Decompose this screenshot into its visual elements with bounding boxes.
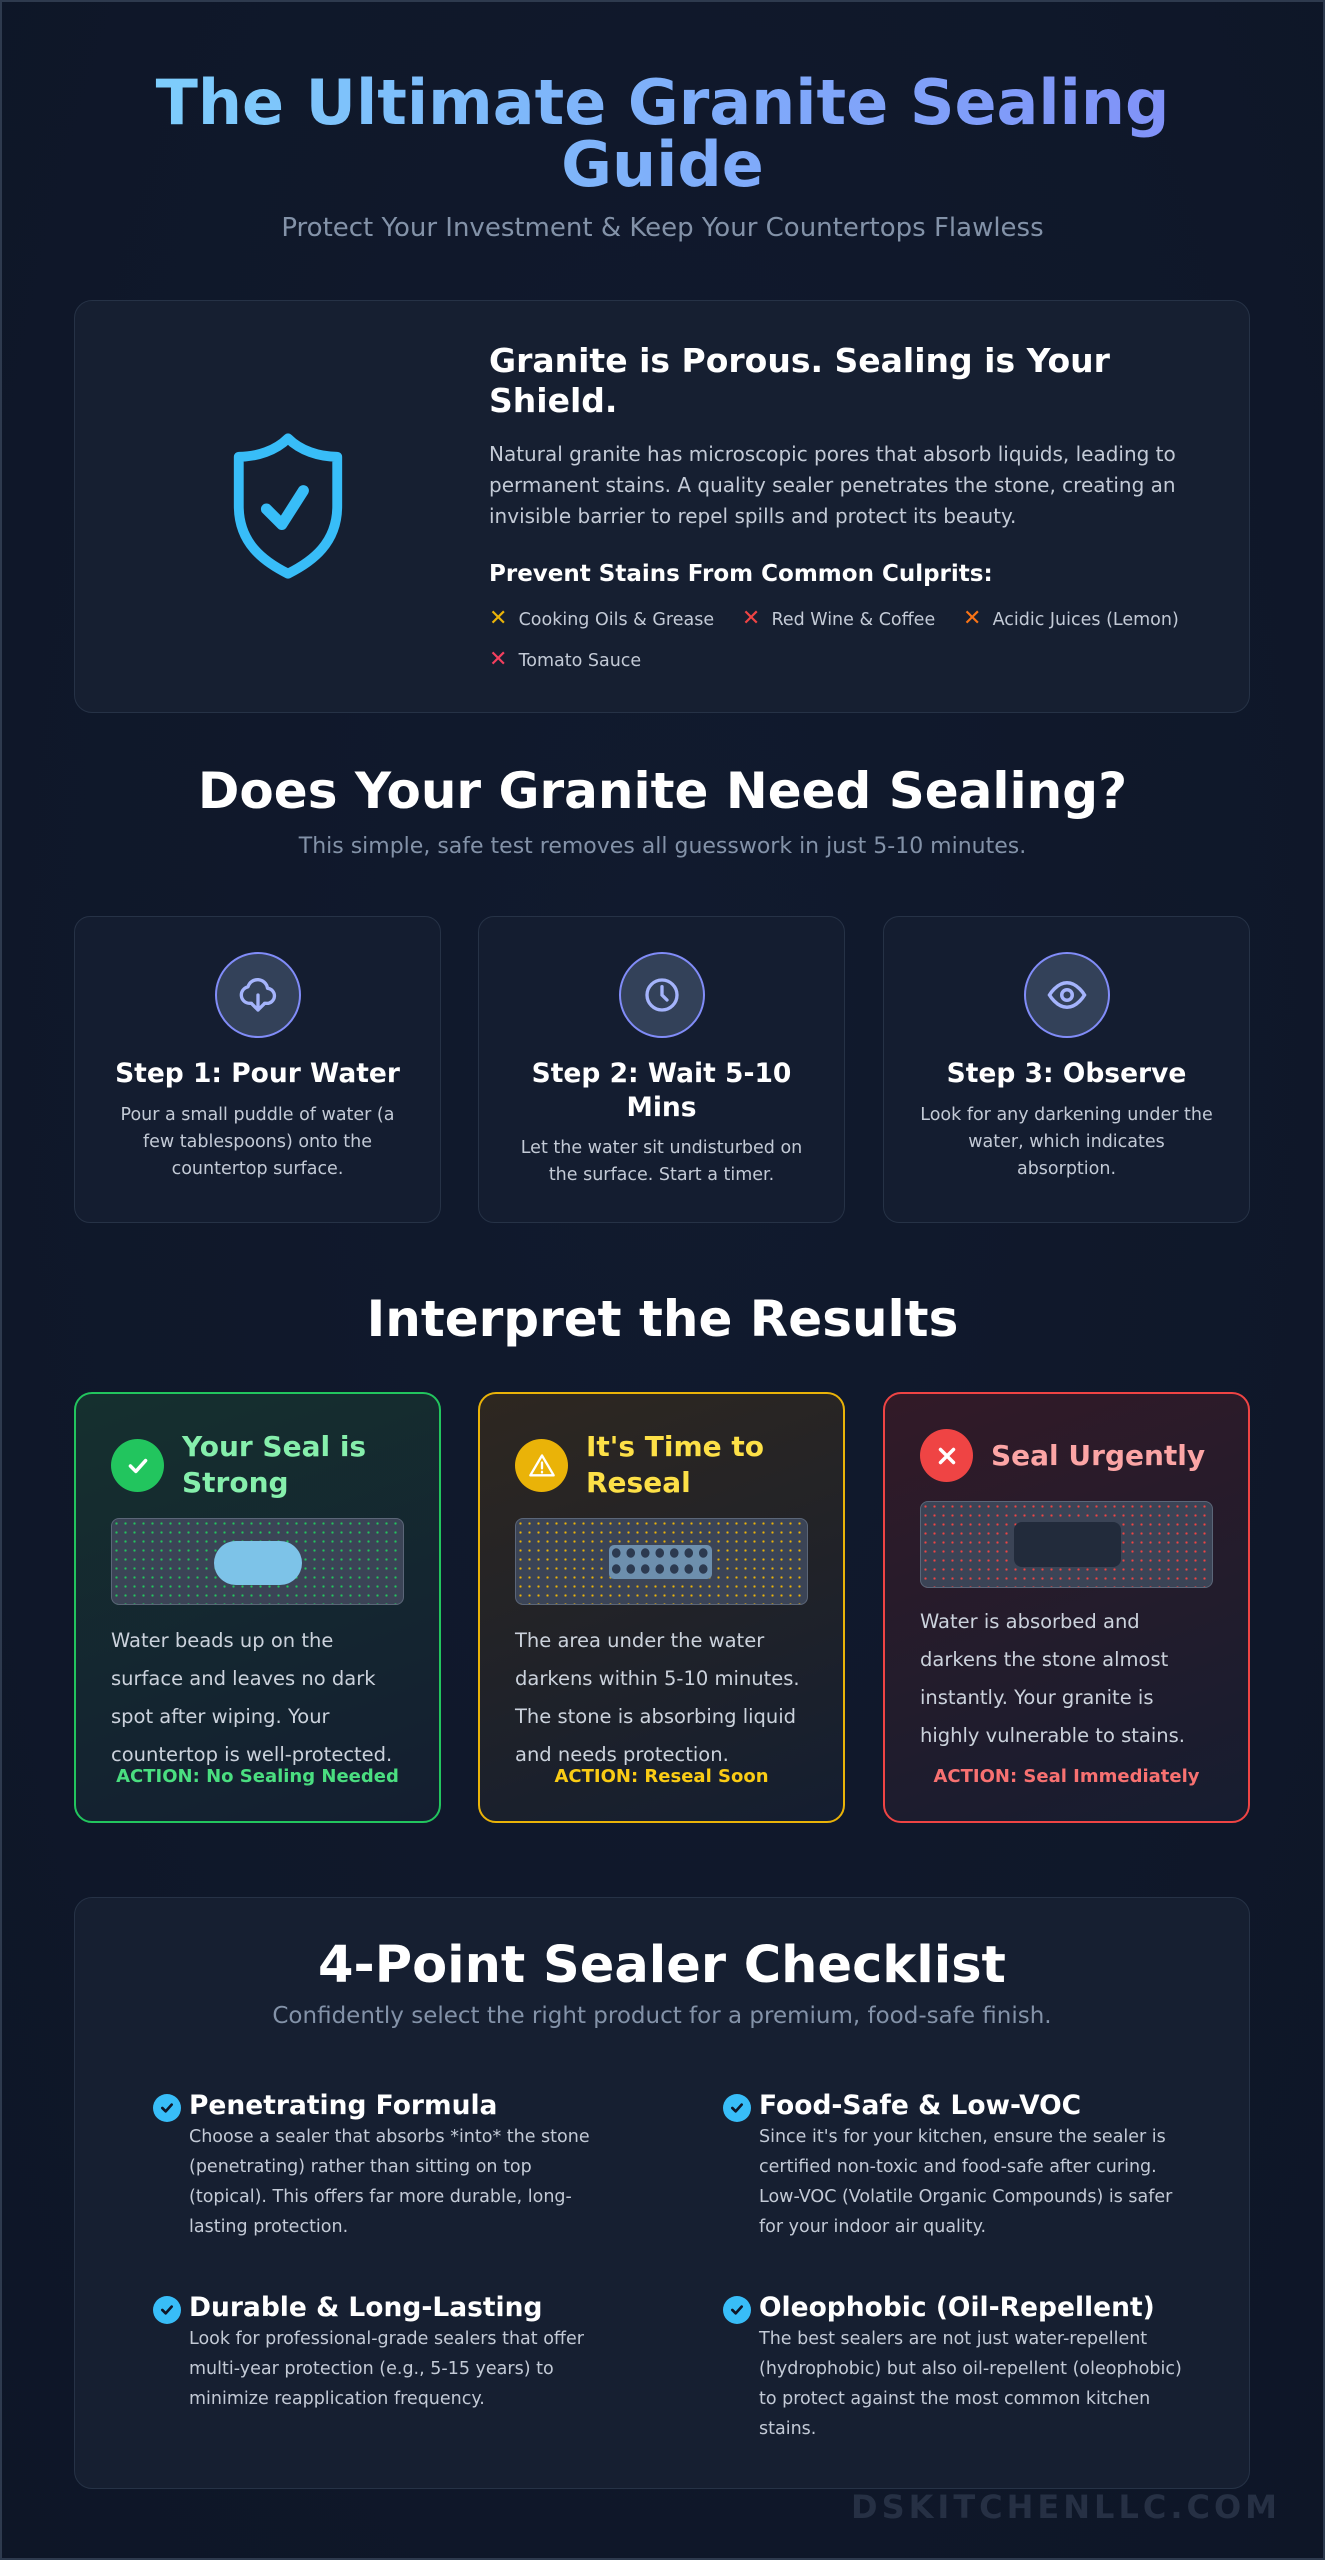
item: oleophobic: stains. [759,2419,816,2439]
step 3: Look for any darkening under the [920,1105,1213,1125]
icon: eye [1024,952,1110,1038]
step 3: absorption. [1017,1159,1116,1179]
result: strong: ACTION: No Sealing Needed [116,1766,399,1787]
result: reseal: It's Time to [586,1430,764,1463]
result: strong: countertop is well-protected. [111,1743,392,1766]
step 3: water, which indicates [968,1132,1165,1152]
result: urgent [883,1392,1250,1823]
subheading: This simple, safe test removes all guesswork in just 5-10 minutes. [299,834,1026,859]
result: strong: surface and leaves no dark [111,1667,376,1690]
heading: does your granite need sealing: Does Your Granite Need Sealing? [198,762,1127,820]
icon: x [920,1429,973,1482]
item: oleophobic: (hydrophobic) but also oil-repellent (oleophobic) [759,2359,1182,2379]
step 3 [883,916,1250,1223]
step 1: Pour a small puddle of water (a [121,1105,394,1125]
result: reseal: The stone is absorbing liquid [515,1705,796,1728]
title: The Ultimate Granite Sealing Guide [156,66,1169,201]
item: durable: Look for professional-grade sealers that offer [189,2329,584,2349]
item: oleophobic [723,2292,1182,2439]
culprit list: ✕ Cooking Oils & Grease ✕ Red Wine & Coffee ✕ Acidic Juices (Lemon) [489,606,1179,631]
item: food-safe: Low-VOC (Volatile Organic Compounds) is safer [759,2187,1172,2207]
item: durable: minimize reapplication frequency. [189,2389,485,2409]
icon: shield [234,433,342,579]
result: strong: Water beads up on the [111,1629,333,1652]
step 2 [478,916,845,1223]
item: food-safe: for your indoor air quality. [759,2217,986,2237]
result: reseal [478,1392,845,1823]
step 2: Step 2: Wait 5-10 [532,1058,791,1089]
item: penetrating: Choose a sealer that absorbs *into* the stone [189,2127,590,2147]
step 1: few tablespoons) onto the [143,1132,372,1152]
item: durable: multi-year protection (e.g., 5-15 years) to [189,2359,554,2379]
culprit list [489,606,1179,672]
item: durable [153,2292,584,2409]
heading: Granite is Porous. Sealing is Your Shield. [489,341,1110,420]
step 2: Mins [626,1092,697,1123]
subtitle: Protect Your Investment & Keep Your Countertops Flawless [281,213,1044,243]
item: food-safe: Food-Safe & Low-VOC [759,2090,1081,2121]
item: food-safe: Since it's for your kitchen, ensure the sealer is [759,2127,1166,2147]
stone: absorbed [920,1501,1213,1588]
step 2: Let the water sit undisturbed on [521,1138,802,1158]
step 3: Step 3: Observe [947,1058,1186,1089]
result: reseal: and needs protection. [515,1743,729,1766]
item: penetrating [153,2090,590,2237]
result: urgent: instantly. Your granite is [920,1686,1153,1709]
panel: checklist [74,1897,1250,2489]
icon: check [111,1439,164,1492]
panel: intro [74,300,1250,713]
checklist subtitle: Confidently select the right product for a premium, food-safe finish. [272,2003,1052,2029]
result: urgent: Water is absorbed and [920,1610,1140,1633]
heading: interpret results: Interpret the Results [367,1290,958,1348]
culprits heading: Prevent Stains From Common Culprits: [489,561,993,587]
result: strong [74,1392,441,1823]
result: strong: spot after wiping. Your [111,1705,330,1728]
result: reseal: The area under the water [515,1629,764,1652]
result: strong: Strong [182,1466,289,1499]
body text: Natural granite has microscopic pores that absorb liquids, leading to permanent stains. A quality sealer penetrates the stone, creating an invisible barrier to repel spills and protect its beauty. [489,442,1176,528]
item: penetrating: (penetrating) rather than sitting on top [189,2157,532,2177]
result: reseal: ACTION: Reseal Soon [554,1766,769,1787]
result: urgent: highly vulnerable to stains. [920,1724,1185,1747]
step 1: Step 1: Pour Water [115,1058,400,1089]
stone: beading water [111,1518,404,1605]
stone: darkening [515,1518,808,1605]
item: food-safe: certified non-toxic and food-safe after curing. [759,2157,1157,2177]
item: penetrating: Penetrating Formula [189,2090,497,2121]
item: oleophobic: Oleophobic (Oil-Repellent) [759,2292,1155,2323]
step 1: countertop surface. [172,1159,343,1179]
icon: cloud download [215,952,301,1038]
culprit list: ✕ Tomato Sauce [489,647,641,672]
result: urgent: Seal Urgently [991,1439,1205,1472]
item: durable: Durable & Long-Lasting [189,2292,542,2323]
item: penetrating: (topical). This offers far more durable, long- [189,2187,572,2207]
item: oleophobic: to protect against the most common kitchen [759,2389,1150,2409]
step 2: the surface. Start a timer. [549,1165,774,1185]
result: urgent: darkens the stone almost [920,1648,1168,1671]
result: reseal: Reseal [586,1466,691,1499]
icon: warning [515,1439,568,1492]
item: oleophobic: The best sealers are not just water-repellent [759,2329,1147,2349]
step 1 [74,916,441,1223]
watermark: DSKITCHENLLC.COM [851,2488,1281,2526]
result: urgent: ACTION: Seal Immediately [933,1766,1200,1787]
icon: clock [619,952,705,1038]
item: food-safe [723,2090,1172,2237]
result: strong: Your Seal is [182,1430,366,1463]
result: reseal: darkens within 5-10 minutes. [515,1667,800,1690]
item: penetrating: lasting protection. [189,2217,348,2237]
checklist title: 4-Point Sealer Checklist [318,1936,1006,1995]
